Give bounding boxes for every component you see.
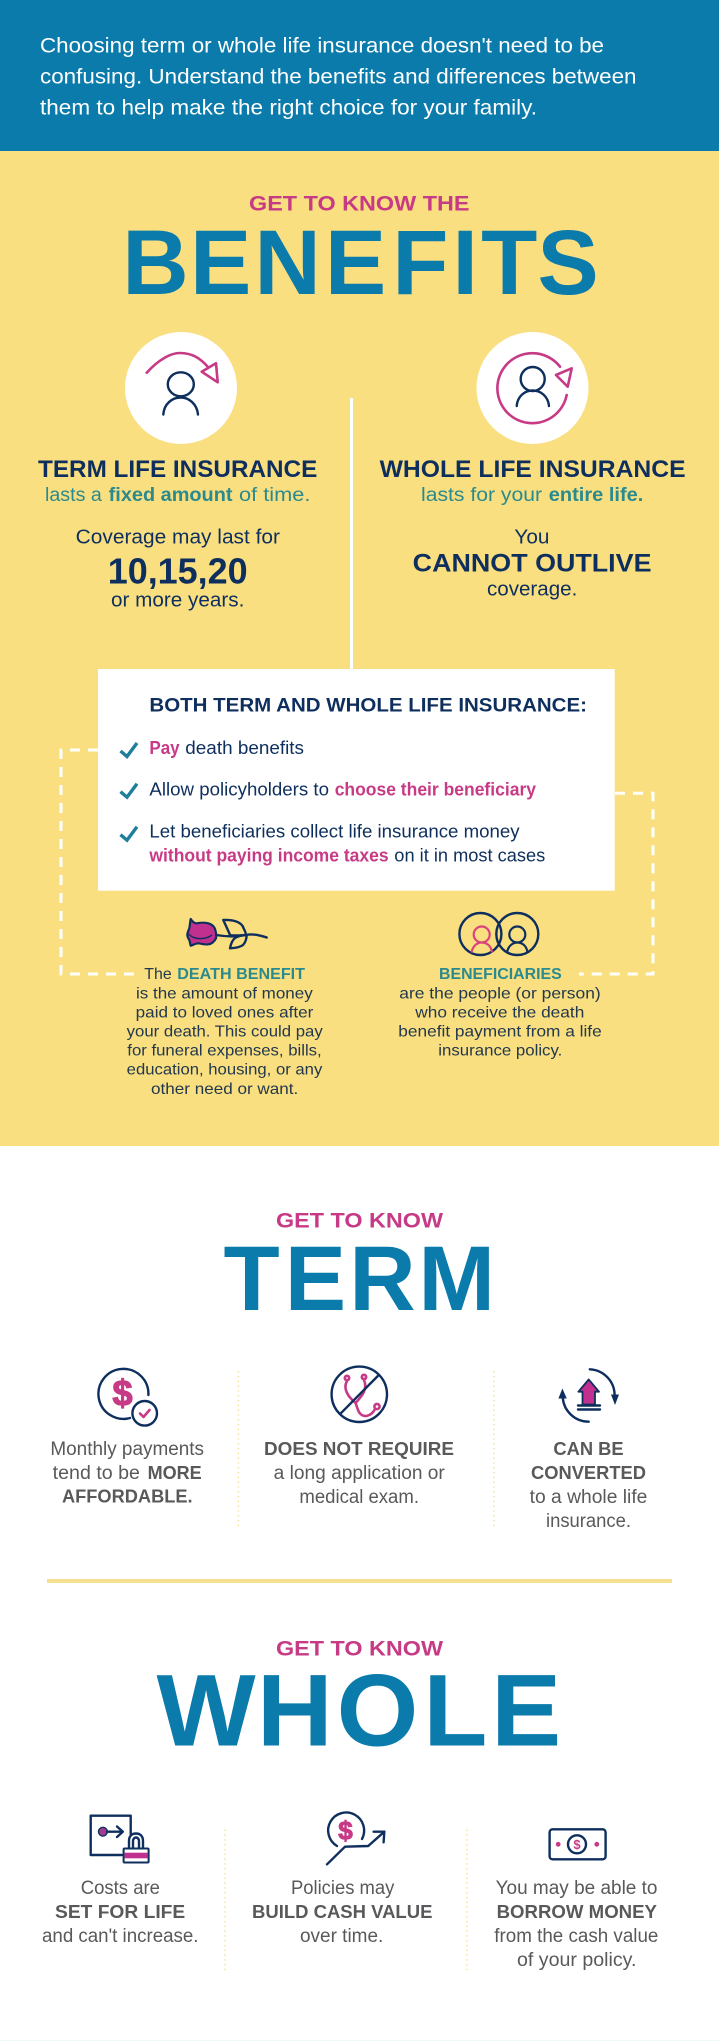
text block: does not require: a long application or	[274, 1463, 445, 1484]
text block: set for life: and can't increase.	[42, 1926, 198, 1947]
text block: term life insurance: Coverage may last for	[76, 526, 280, 548]
text block: death benefit	[127, 966, 323, 1098]
text block: borrow money: You may be able to	[496, 1878, 658, 1899]
text block: beneficiaries: who receive the death	[414, 1005, 584, 1022]
text block: borrow money: of your policy.	[517, 1950, 636, 1971]
text block: set for life: SET FOR LIFE	[55, 1901, 185, 1922]
text block: can be converted: to a whole life	[530, 1487, 647, 1508]
icon: term life person with partial arc	[125, 332, 237, 444]
text block: borrow money: from the cash value	[494, 1926, 658, 1947]
text block: build cash value	[252, 1878, 432, 1947]
text block: whole life insurance: CANNOT OUTLIVE	[413, 549, 652, 577]
panel: both term and whole life: Pay	[149, 738, 180, 758]
heading: get to know term: GET TO KNOW	[276, 1210, 443, 1233]
panel: intro banner: Choosing term or whole life insurance doesn't need to be	[40, 35, 604, 58]
panel: both term and whole life: BOTH TERM AND WHOLE LIFE INSURANCE:	[149, 695, 587, 717]
text block: term life insurance	[38, 457, 317, 612]
text block: death benefit: education, housing, or any	[127, 1062, 322, 1079]
text block: whole life insurance: coverage.	[487, 578, 577, 600]
text block: beneficiaries: insurance policy.	[438, 1042, 562, 1059]
text block: more affordable: AFFORDABLE.	[62, 1486, 193, 1507]
text block: can be converted: insurance.	[546, 1511, 631, 1532]
icon: dollar bill	[550, 1829, 606, 1859]
divider: vertical white line	[350, 398, 353, 670]
text block: build cash value: Policies may	[291, 1878, 395, 1899]
text block: can be converted	[530, 1438, 647, 1532]
text block: death benefit: paid to loved ones after	[136, 1005, 314, 1022]
heading: get to know the benefits: GET TO KNOW THE	[249, 193, 470, 216]
icon: dollar with growth arrow: $	[338, 1816, 353, 1846]
panel: intro banner: them to help make the right choice for your family.	[40, 96, 537, 119]
text block: term life insurance: TERM LIFE INSURANCE	[38, 457, 317, 483]
panel: both term and whole life: choose their beneficiary	[335, 780, 536, 800]
text block: more affordable: tend to be	[53, 1463, 140, 1484]
text block: more affordable	[50, 1439, 204, 1507]
icon: dollar with growth arrow	[327, 1812, 384, 1864]
text block: borrow money	[494, 1878, 658, 1971]
heading: get to know the benefits: BENEFITS	[122, 212, 599, 314]
icon: check 2	[120, 784, 137, 797]
text block: set for life: Costs are	[81, 1878, 160, 1899]
icon: beneficiaries	[459, 913, 538, 955]
text block: can be converted: CONVERTED	[531, 1462, 646, 1483]
icon: check 1	[120, 743, 137, 756]
icon: conversion arrows	[558, 1369, 619, 1422]
text block: death benefit: The	[144, 966, 172, 983]
text block: term life insurance: 10,15,20	[108, 550, 248, 591]
text block: term life insurance: fixed amount	[109, 485, 233, 506]
panel: both term and whole life: death benefits	[185, 738, 304, 758]
text block: death benefit: for funeral expenses, bills,	[127, 1042, 322, 1059]
divider: yellow rule	[47, 1579, 672, 1583]
icon: crossed out stethoscope	[332, 1367, 387, 1422]
panel: benefits background	[0, 151, 719, 1146]
text block: can be converted: CAN BE	[553, 1438, 624, 1459]
panel: intro banner: confusing. Understand the benefits and differences between	[40, 66, 636, 88]
text block: whole life insurance: lasts for your	[421, 485, 543, 506]
panel: both term and whole life: Let beneficiaries collect life insurance money	[149, 822, 520, 842]
text block: whole life insurance	[380, 457, 686, 600]
icon: rose	[187, 919, 267, 948]
panel: both term and whole life: on it in most cases	[394, 846, 545, 866]
text block: does not require	[264, 1438, 454, 1508]
text block: beneficiaries: BENEFICIARIES	[439, 966, 562, 983]
text block: whole life insurance: WHOLE LIFE INSURANCE	[380, 457, 686, 483]
divider: whole dotted lines	[225, 1830, 467, 1972]
text block: does not require: DOES NOT REQUIRE	[264, 1438, 454, 1459]
panel: both term and whole life	[98, 669, 615, 891]
text block: beneficiaries	[398, 966, 602, 1059]
text block: death benefit: other need or want.	[151, 1081, 298, 1098]
panel: intro banner	[0, 0, 719, 151]
text block: whole life insurance: entire life.	[549, 485, 643, 506]
heading: get to know term: TERM	[224, 1228, 495, 1330]
text block: death benefit: your death. This could pay	[127, 1024, 323, 1041]
text block: set for life	[42, 1878, 198, 1947]
connector: dashed line right	[579, 793, 653, 974]
text block: does not require: medical exam.	[299, 1487, 419, 1508]
icon: check 3	[120, 827, 137, 840]
text block: build cash value: BUILD CASH VALUE	[252, 1901, 432, 1922]
panel: both term and whole life: without paying income taxes	[148, 846, 389, 866]
icon: door with lock	[91, 1816, 149, 1862]
text block: beneficiaries: are the people (or person)	[399, 985, 601, 1002]
text block: whole life insurance: You	[514, 526, 549, 548]
text block: more affordable: Monthly payments	[50, 1439, 204, 1460]
connector: dashed line left	[61, 750, 136, 974]
icon: dollar with check: $	[112, 1372, 133, 1414]
icon: whole life person with full circle arrow	[476, 332, 588, 444]
text block: term life insurance: of time.	[239, 485, 310, 506]
heading: get to know whole: WHOLE	[157, 1653, 561, 1767]
text block: term life insurance: or more years.	[111, 590, 244, 612]
divider: term dotted lines	[238, 1371, 494, 1529]
text block: term life insurance: lasts a	[45, 485, 102, 506]
icon: dollar bill: $	[573, 1837, 581, 1852]
text block: death benefit: DEATH BENEFIT	[177, 966, 305, 983]
text block: build cash value: over time.	[300, 1926, 383, 1947]
text block: more affordable: MORE	[148, 1462, 202, 1483]
text block: beneficiaries: benefit payment from a life	[398, 1024, 602, 1041]
heading: get to know whole: GET TO KNOW	[276, 1637, 443, 1660]
icon: dollar with check	[98, 1369, 157, 1426]
panel: both term and whole life: Allow policyholders to	[149, 780, 329, 800]
text block: borrow money: BORROW MONEY	[497, 1901, 658, 1922]
text block: death benefit: is the amount of money	[136, 985, 313, 1002]
